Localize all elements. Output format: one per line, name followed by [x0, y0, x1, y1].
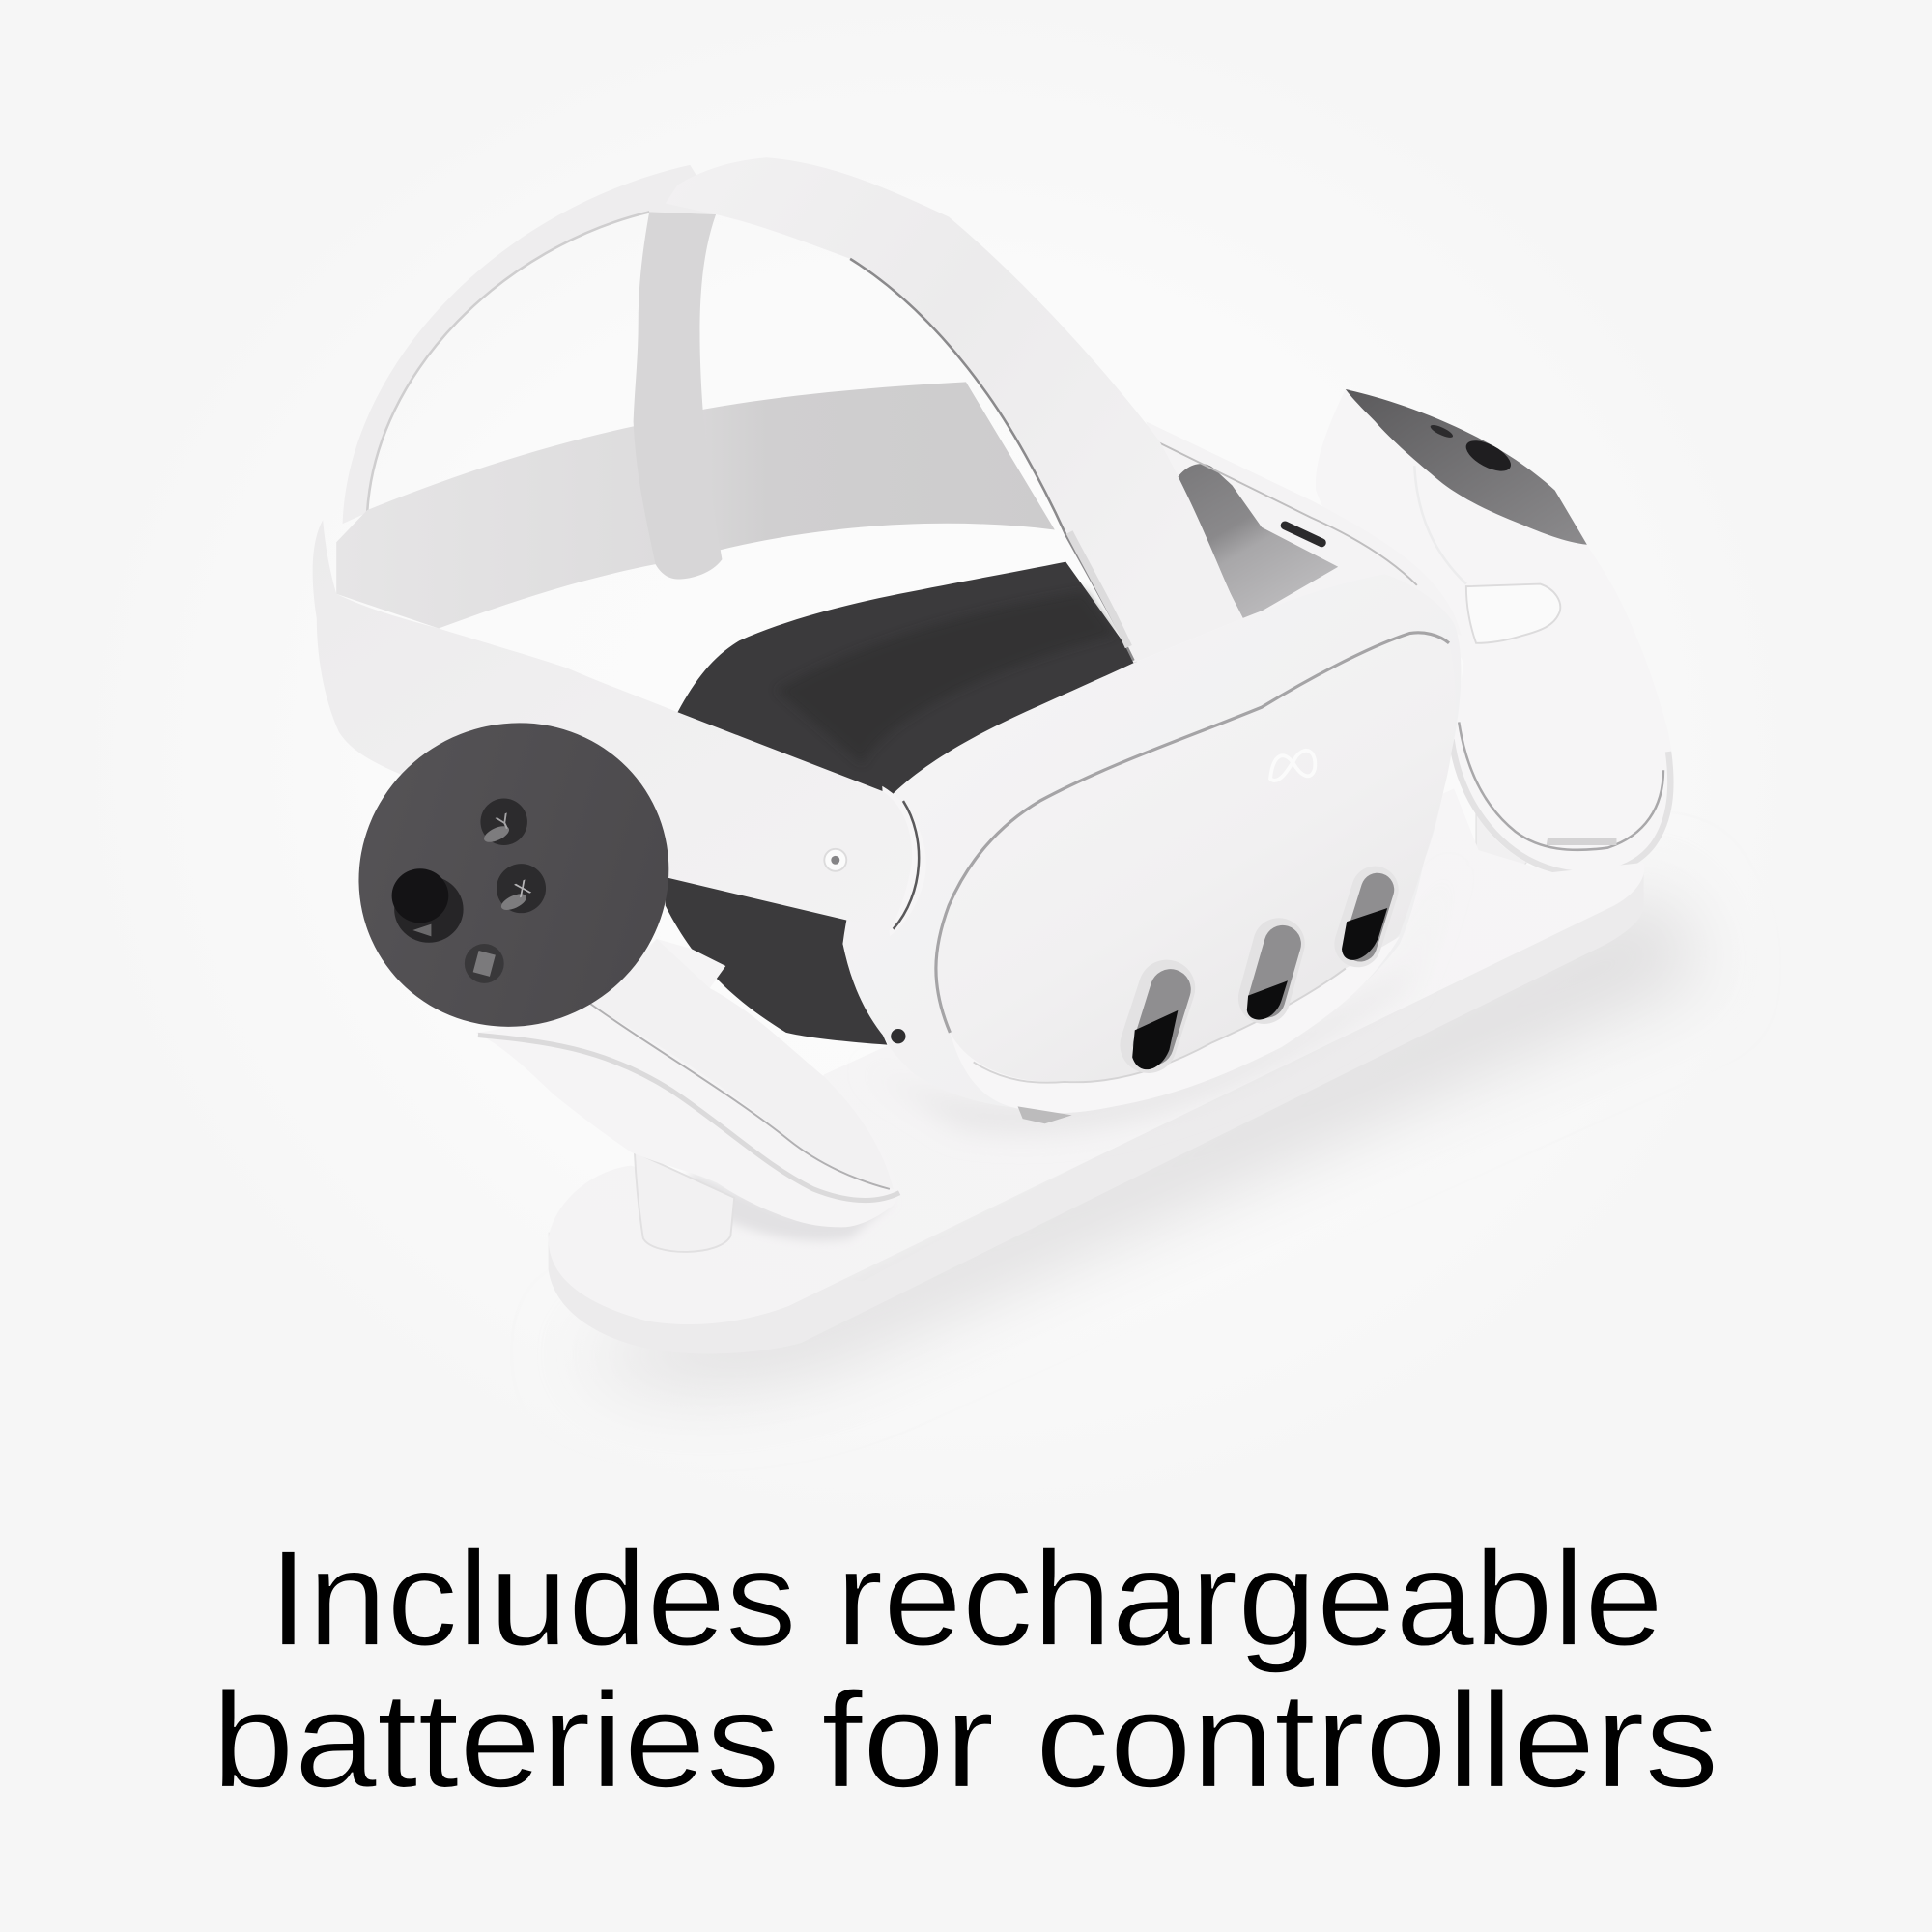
battery slot — [1547, 838, 1616, 845]
caption — [212, 1522, 1719, 1815]
headset foot — [1018, 1106, 1072, 1123]
main strap — [666, 157, 1242, 663]
dock stem — [635, 1152, 734, 1252]
rear gray band — [336, 382, 1055, 629]
front visor — [936, 634, 1456, 1082]
controller dark top — [1346, 389, 1587, 545]
shadow under controller — [690, 1171, 894, 1240]
side shell — [842, 574, 1461, 1113]
menu button — [465, 944, 504, 983]
caption line 1: Includes rechargeable — [269, 1522, 1663, 1674]
y button — [480, 799, 527, 845]
hinge shadow — [894, 801, 919, 929]
floor shadow — [579, 887, 1707, 1385]
background glow — [49, 0, 1824, 1552]
grip panel — [577, 939, 894, 1189]
main strap inner edge — [850, 259, 1133, 661]
thumbstick — [1429, 423, 1516, 477]
sensor left — [1132, 988, 1178, 1069]
meta logo — [1270, 751, 1315, 781]
controller touch pad — [303, 667, 724, 1083]
left controller — [303, 667, 900, 1227]
charging dock base — [549, 788, 1644, 1353]
pad inner shading — [777, 591, 1115, 764]
base top face — [549, 788, 1644, 1324]
headset top shell — [1146, 421, 1462, 636]
strap screw — [824, 849, 846, 871]
right controller — [1316, 389, 1673, 877]
controller trim — [1459, 722, 1663, 850]
visor edge — [936, 633, 1449, 1033]
front sash — [950, 936, 1400, 1113]
inner visor gray — [1175, 464, 1338, 621]
x button: X — [511, 874, 534, 902]
controller body — [1316, 389, 1673, 874]
strap inner lip — [1069, 532, 1128, 647]
shadow under headset — [863, 863, 1454, 1132]
thin top strap — [343, 165, 721, 524]
front camera dot — [891, 1029, 906, 1043]
face pad — [666, 562, 1140, 1045]
x button — [497, 864, 546, 913]
trigger panel — [1466, 584, 1560, 643]
base side edge — [549, 863, 1644, 1353]
handle trim — [478, 1035, 899, 1201]
sash top line — [974, 969, 1346, 1083]
headset body — [842, 574, 1461, 1123]
controller handle — [475, 939, 900, 1227]
handle seam — [579, 996, 890, 1189]
strap hinge — [882, 786, 926, 936]
sensor right — [1342, 890, 1387, 960]
side strap — [313, 520, 926, 936]
controller stem — [1476, 801, 1535, 877]
usb port — [1279, 520, 1327, 549]
sensor middle — [1247, 944, 1288, 1020]
thin strap edge — [367, 212, 649, 513]
joystick — [392, 868, 464, 943]
top rim seam — [1155, 441, 1417, 585]
caption line 2: batteries for controllers — [212, 1663, 1719, 1815]
y button: Y — [493, 809, 516, 836]
controller seam — [1414, 466, 1466, 584]
vertical strap — [634, 212, 722, 579]
strap band — [313, 520, 912, 930]
controller outer band — [1452, 739, 1670, 874]
